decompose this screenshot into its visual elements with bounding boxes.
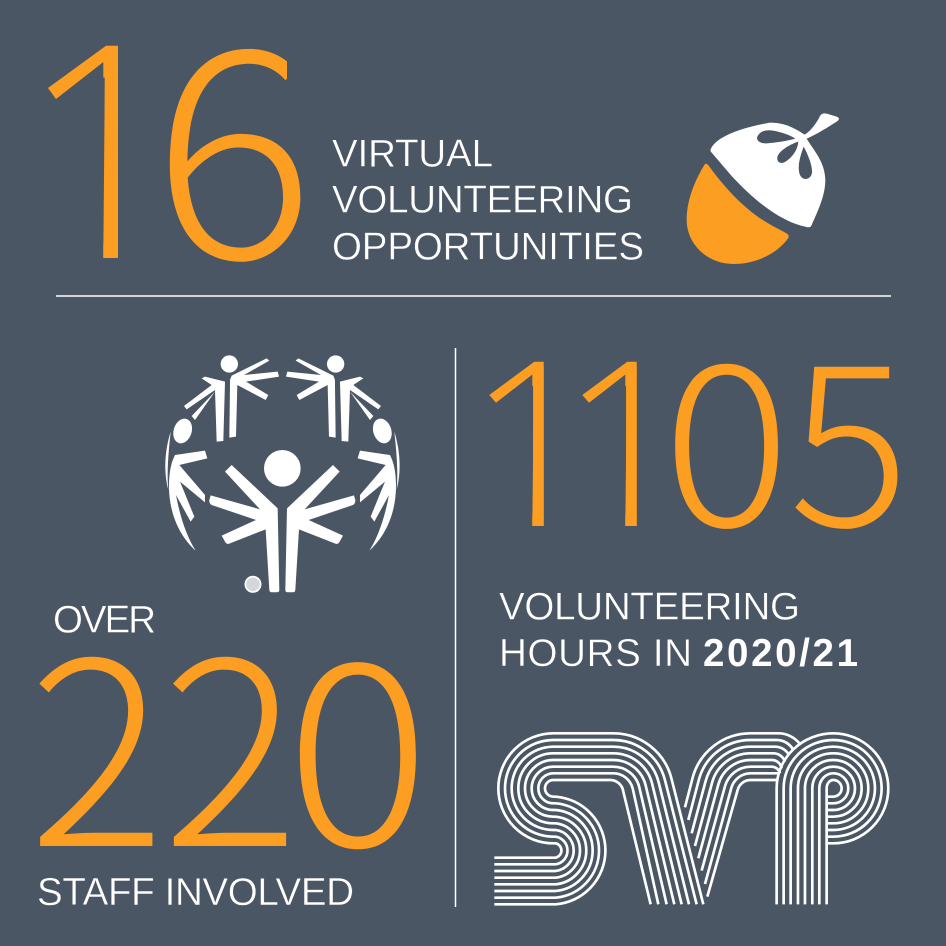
text: virtual volunteering opportunities: VIRTUAL [332,133,493,176]
number: 1105: 5 [789,265,909,591]
lower-left figure [165,416,207,551]
letter V right stroke [685,733,800,897]
logo: SVP [494,733,888,904]
number: 220: 0 [286,550,430,920]
top-right figure [286,355,381,442]
central figure [209,450,355,592]
label: volunteering hours [499,585,858,675]
label: volunteering hours: 2020/21 [703,632,858,675]
label: staff involved: STAFF INVOLVED [37,871,354,914]
text: virtual volunteering opportunities: VOLUNTEERING [332,179,633,222]
number: 1105: 0 [662,265,791,591]
lower-right figure [358,416,400,551]
label: volunteering hours: HOURS IN [499,632,692,675]
number: 220: 22 [29,551,299,920]
text: virtual volunteering opportunities: OPPORTUNITIES [332,226,644,268]
letter S and V left stroke [494,733,703,904]
label: volunteering hours: VOLUNTEERING [499,585,800,628]
number: 1105 [489,362,898,529]
icon: acorn [687,113,839,264]
top-left figure [184,355,279,442]
number: 1105: 1 [475,265,595,591]
letter P [777,733,888,904]
label: over: OVER [53,599,156,642]
text: virtual volunteering opportunities [332,133,644,268]
number: 220 [29,550,430,920]
icon: Special Olympics logo [165,355,400,592]
number: 1105: 1 [568,265,688,591]
number: 16 [48,46,300,262]
